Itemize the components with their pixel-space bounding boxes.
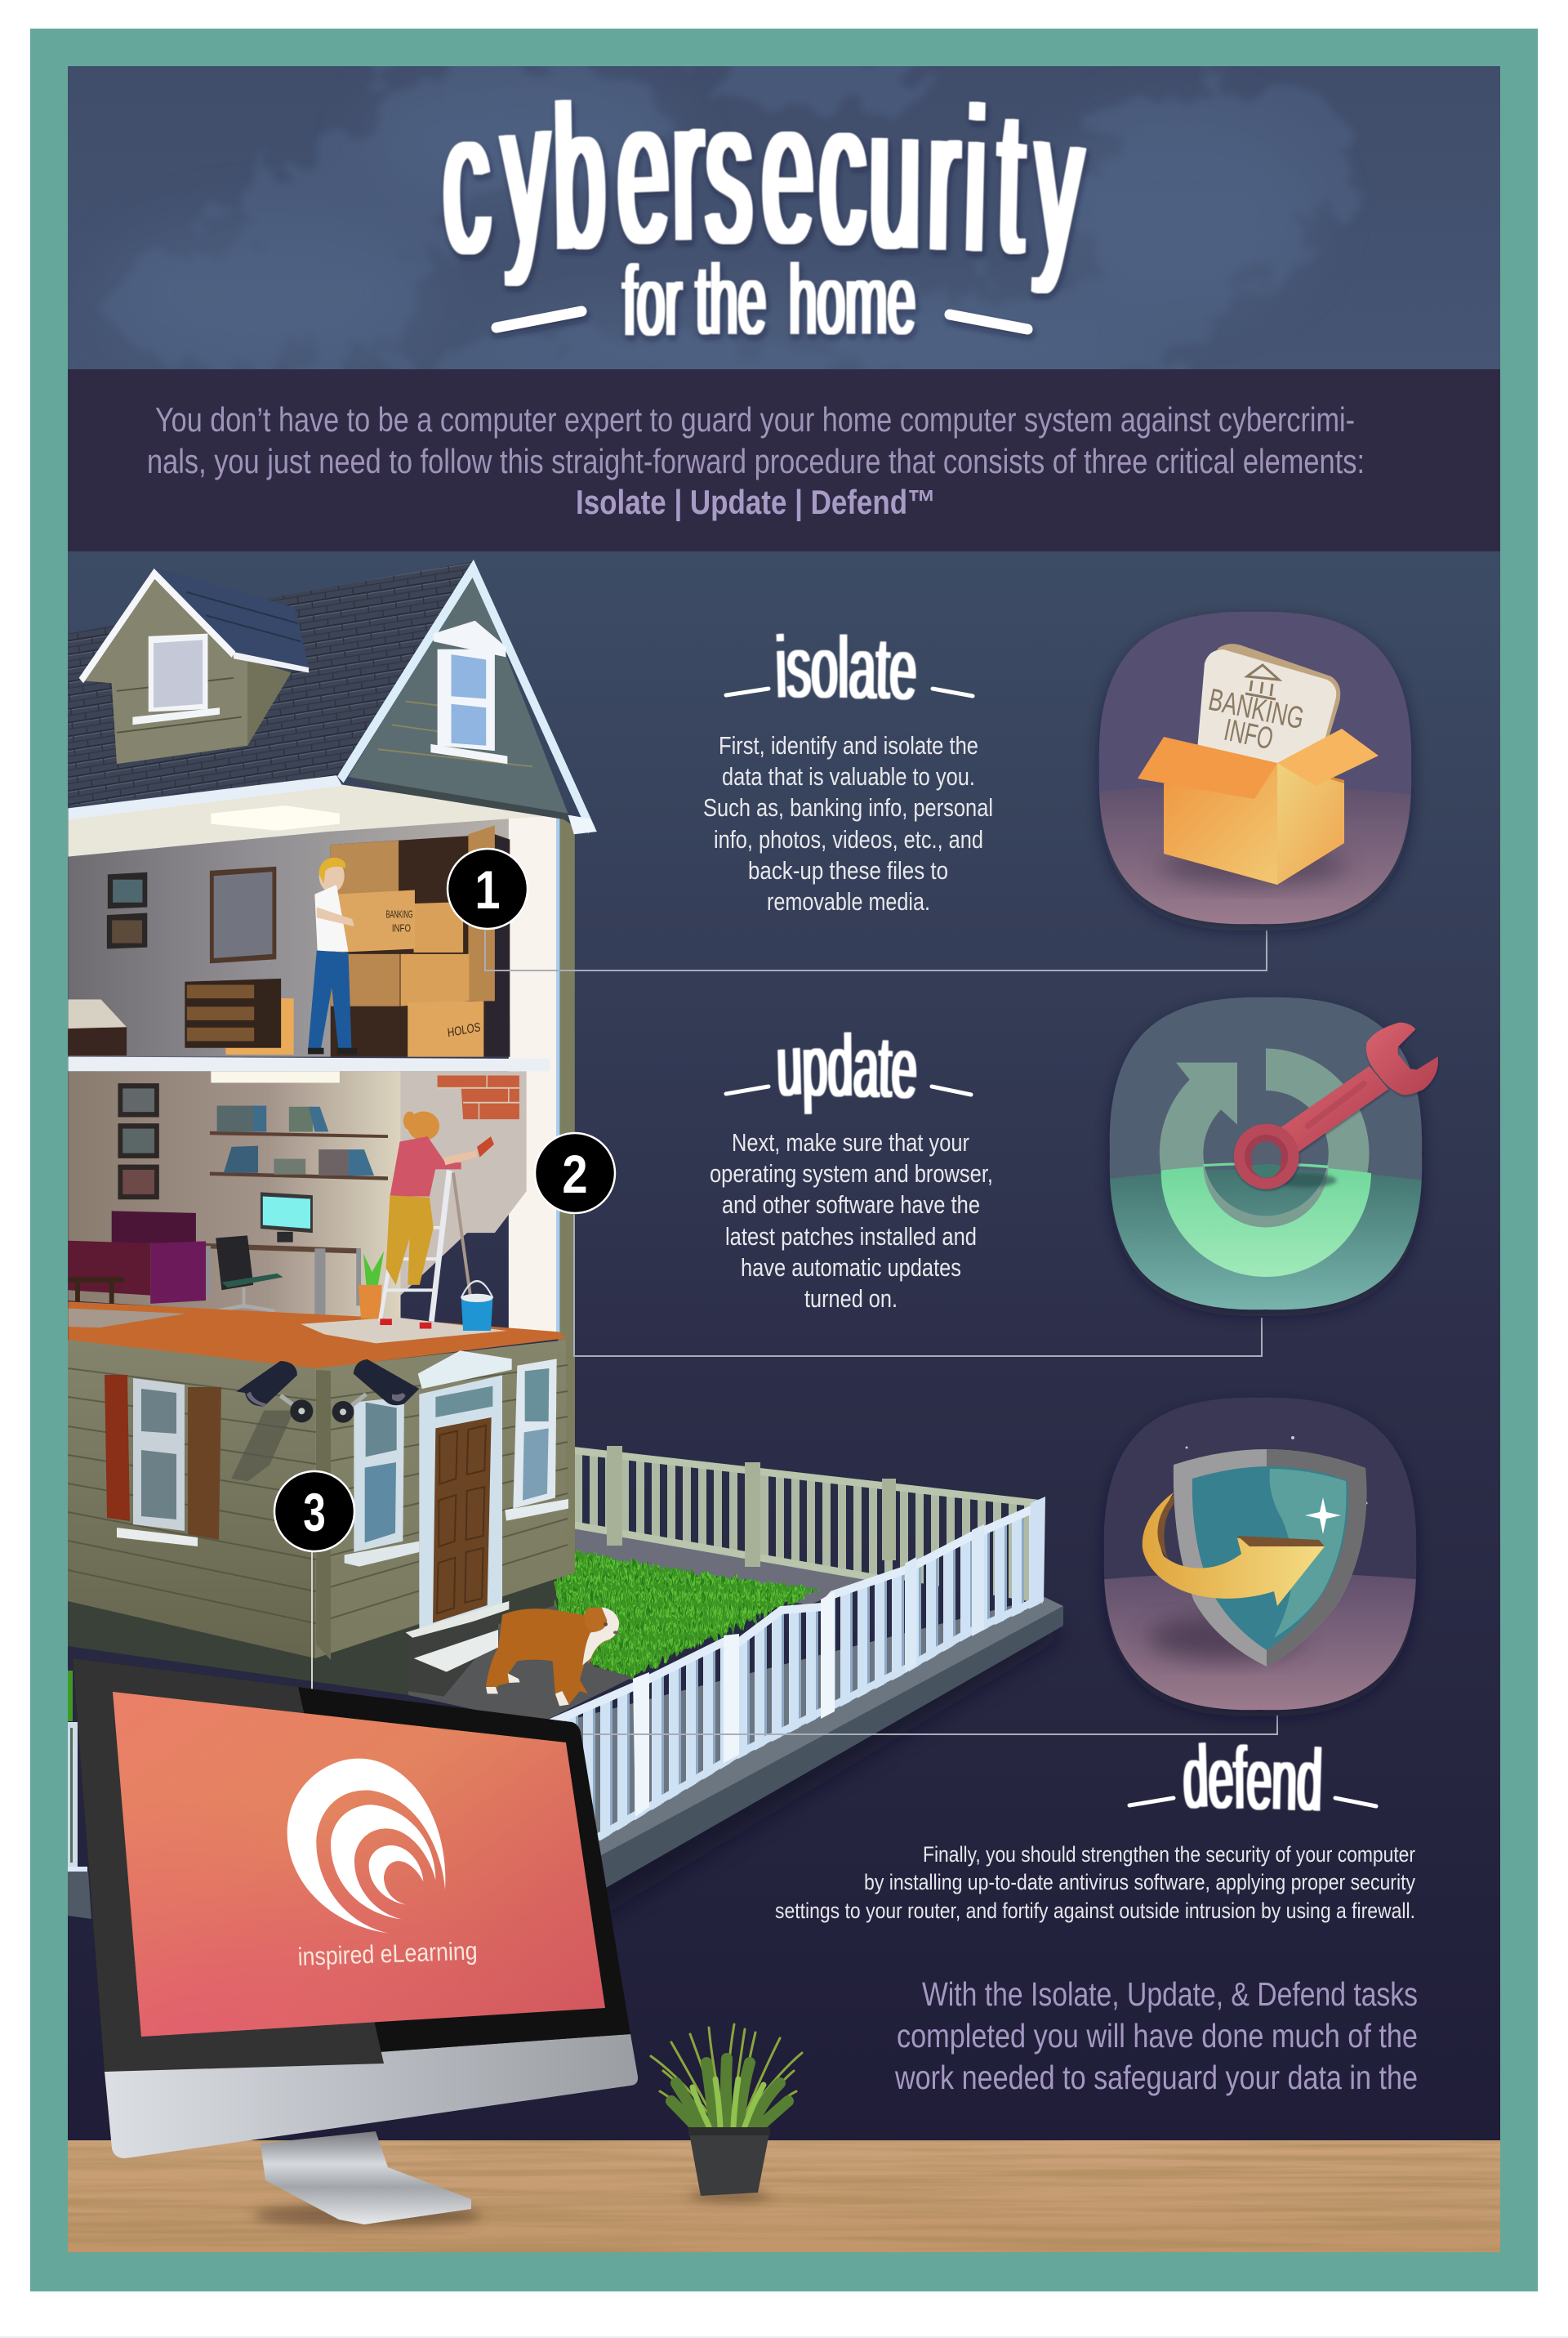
siding bbox=[68, 1365, 568, 1623]
sparkle bbox=[1305, 1497, 1341, 1534]
closing statement: With the Isolate, Update, & Defend tasks bbox=[922, 1975, 1418, 2013]
corner post bbox=[316, 1370, 331, 1660]
section: defend heading bbox=[1129, 1727, 1376, 1831]
floor box bbox=[225, 998, 294, 1055]
back fence bbox=[570, 1446, 1043, 1604]
computer monitor bbox=[73, 1658, 638, 2224]
defend description: by installing up-to-date antivirus software, applying proper security bbox=[864, 1870, 1415, 1894]
left window with shutters bbox=[105, 1375, 221, 1546]
isolate description: data that is valuable to you. bbox=[722, 762, 975, 791]
numbered badge 3 bbox=[274, 1471, 354, 1551]
gable trim bbox=[341, 569, 592, 831]
numbered badge 1 bbox=[448, 849, 528, 929]
box: banking info bbox=[336, 890, 415, 953]
main roof bbox=[68, 562, 473, 805]
numbered badge 2 bbox=[535, 1133, 615, 1213]
right wall bbox=[315, 1340, 568, 1658]
ground and path bbox=[68, 1550, 821, 1724]
inspired eLearning logo bbox=[287, 1759, 445, 1934]
leaves bbox=[651, 2024, 802, 2126]
bulldog bbox=[486, 1607, 619, 1706]
subtitle dash left bbox=[497, 311, 581, 328]
stars bbox=[1186, 1436, 1367, 1560]
plant in pot bbox=[651, 2024, 802, 2196]
lower room wall bbox=[68, 1071, 401, 1322]
title bbox=[439, 56, 1085, 356]
monitor screen bbox=[113, 1692, 605, 2037]
side window bbox=[345, 1397, 419, 1567]
man carrying box bbox=[308, 858, 357, 1054]
bank glyph bbox=[1245, 665, 1279, 699]
icon: shield and arrow bbox=[1097, 1398, 1423, 1733]
update description: operating system and browser, bbox=[710, 1159, 993, 1188]
connector line 3 bbox=[311, 1552, 313, 1691]
section: update heading bbox=[726, 1016, 971, 1118]
banking card bbox=[1196, 644, 1340, 784]
ceiling light bbox=[211, 805, 340, 831]
update description: latest patches installed and bbox=[725, 1222, 977, 1251]
left wall bbox=[68, 1340, 315, 1658]
cardboard box bbox=[1138, 729, 1379, 885]
intro paragraph: Isolate | Update | Defend™ bbox=[576, 483, 936, 522]
pot bbox=[688, 2129, 770, 2196]
gable window bbox=[430, 621, 507, 764]
house upper floors bbox=[68, 562, 597, 1369]
roof bbox=[68, 562, 597, 834]
update description: have automatic updates bbox=[741, 1253, 961, 1282]
connector line 2 bbox=[574, 1215, 1262, 1356]
section: isolate heading bbox=[726, 618, 973, 720]
isolate description: back-up these files to bbox=[748, 856, 948, 885]
update description: Next, make sure that your bbox=[732, 1128, 969, 1157]
exposed bricks bbox=[438, 1076, 519, 1119]
front fence bbox=[523, 1497, 1045, 1848]
gold arrow bbox=[1143, 1492, 1325, 1606]
potted plant bbox=[359, 1251, 384, 1318]
defend description: Finally, you should strengthen the security of your computer bbox=[923, 1842, 1415, 1867]
fascia bbox=[68, 775, 342, 819]
monitor stand bbox=[261, 2131, 471, 2224]
box: holos: HOLOS bbox=[447, 1020, 481, 1040]
dresser bbox=[185, 979, 281, 1048]
closing statement bbox=[894, 1975, 1418, 2096]
lower pictures bbox=[118, 1083, 159, 1199]
closing statement: work needed to safeguard your data in the bbox=[894, 2059, 1418, 2096]
closing statement: completed you will have done much of the bbox=[897, 2017, 1418, 2055]
white end wall bbox=[509, 816, 559, 1335]
outer wall strip bbox=[558, 816, 575, 1355]
dormer bbox=[81, 569, 309, 764]
left fence fragment bbox=[68, 1671, 91, 1919]
eave return bbox=[568, 815, 597, 834]
box: banking info: INFO bbox=[392, 923, 411, 935]
defend description: settings to your router, and fortify against outside intrusion by using a firewall. bbox=[775, 1899, 1415, 1923]
update description bbox=[710, 1128, 993, 1313]
monitor bezel bbox=[73, 1658, 630, 2072]
numbered badge 3: 3 bbox=[303, 1483, 326, 1543]
main dark panel background bbox=[68, 551, 1500, 2144]
faint page rule at bottom bbox=[0, 2336, 1568, 2338]
wooden desk bbox=[68, 2140, 1500, 2252]
defend description bbox=[775, 1842, 1415, 1923]
numbered badge 1: 1 bbox=[474, 860, 501, 920]
gable wall bbox=[349, 571, 568, 814]
logo wordmark: inspired eLearning bbox=[297, 1936, 478, 1971]
door bbox=[406, 1350, 512, 1697]
side trim bbox=[566, 1340, 575, 1576]
closet bbox=[331, 825, 510, 1057]
icon: update with wrench bbox=[1102, 997, 1438, 1333]
connector line 3 horizontal bbox=[583, 1716, 1277, 1734]
numbered badge 2: 2 bbox=[562, 1144, 588, 1204]
lawn bbox=[555, 1550, 821, 1677]
isolate description: Such as, banking info, personal bbox=[703, 793, 993, 822]
subtitle: for the home: home bbox=[789, 243, 915, 355]
front door, windows and cameras bbox=[231, 1350, 619, 1706]
wood floor bbox=[68, 1301, 567, 1369]
header panel with clouds bbox=[68, 66, 1500, 369]
isolate description bbox=[703, 731, 993, 916]
circular arrow bbox=[1160, 1048, 1369, 1258]
wall pictures bbox=[107, 867, 276, 963]
box: holos bbox=[408, 1001, 483, 1057]
office chair bbox=[216, 1235, 283, 1311]
right window bbox=[505, 1359, 568, 1521]
wrench bbox=[1234, 1023, 1438, 1189]
section: update heading: update bbox=[776, 1016, 918, 1118]
upper room wall bbox=[68, 816, 510, 1057]
monitor chin bbox=[105, 2034, 638, 2158]
walkway bbox=[408, 1605, 633, 1724]
section: defend heading: defend bbox=[1182, 1727, 1324, 1831]
subtitle: for the home: the bbox=[696, 243, 766, 355]
yard slab bbox=[523, 1528, 1063, 1920]
update description: turned on. bbox=[804, 1284, 898, 1313]
bed bbox=[68, 999, 127, 1055]
isolate description: removable media. bbox=[767, 887, 930, 916]
shield bbox=[1174, 1449, 1366, 1666]
woman painting bbox=[380, 1112, 494, 1328]
sofa bbox=[68, 1211, 206, 1314]
box shadow bbox=[1160, 846, 1348, 886]
shield shadow bbox=[1147, 1615, 1303, 1661]
security camera left bbox=[236, 1361, 313, 1422]
house ground floor bbox=[68, 1340, 619, 1706]
isolate description: info, photos, videos, etc., and bbox=[714, 825, 983, 854]
box: banking info: BANKING bbox=[386, 909, 413, 921]
isolate description: First, identify and isolate the bbox=[719, 731, 978, 760]
circular arrow lower part bbox=[1161, 1162, 1371, 1277]
attic ceiling bbox=[68, 785, 555, 857]
icon: banking info box bbox=[1092, 612, 1419, 948]
connector line 1 bbox=[485, 930, 1267, 970]
security camera right bbox=[332, 1359, 419, 1423]
intro band bbox=[68, 369, 1500, 551]
banking card: BANKING bbox=[1205, 683, 1307, 736]
paint bucket bbox=[461, 1281, 492, 1331]
subtitle: for the home: for bbox=[623, 244, 682, 356]
desk bbox=[205, 1243, 361, 1315]
bookshelves bbox=[210, 1106, 388, 1180]
subtitle: for the home bbox=[623, 243, 915, 356]
intro paragraph bbox=[147, 400, 1365, 522]
subtitle dash right bbox=[950, 315, 1027, 329]
mid floor slab bbox=[68, 1057, 550, 1071]
camera shadow bbox=[231, 1411, 294, 1481]
ladder bbox=[380, 1171, 470, 1322]
wrench shadow bbox=[1276, 1173, 1337, 1188]
update description: and other software have the bbox=[722, 1190, 980, 1219]
desk shadows bbox=[253, 2190, 770, 2227]
section: isolate heading: isolate bbox=[774, 618, 918, 720]
desk monitor bbox=[261, 1192, 313, 1243]
title word: cybersecurity: cybersecurity bbox=[439, 56, 1085, 301]
banking card: INFO bbox=[1221, 713, 1276, 756]
